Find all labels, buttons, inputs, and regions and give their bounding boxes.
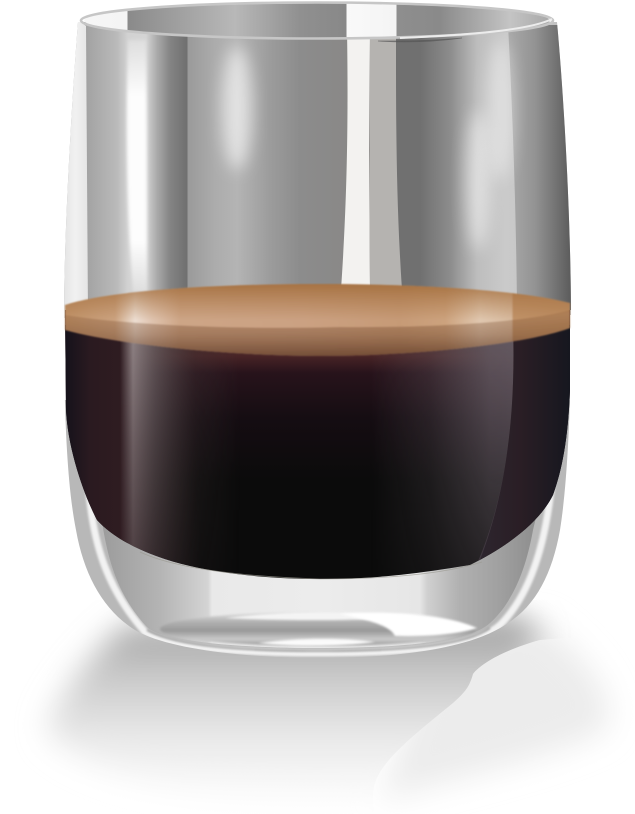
bottom ellipse of the glass — [160, 612, 477, 646]
shadow under rim — [378, 38, 462, 42]
grey vertical reflection — [370, 30, 402, 290]
soft light shadow lobe on the right — [380, 622, 609, 800]
left wall thickness — [64, 22, 88, 318]
rim right highlight — [400, 19, 552, 38]
crema top surface shade — [65, 284, 570, 328]
white right reflection on base — [340, 613, 477, 636]
white vertical reflection — [341, 30, 370, 290]
main cast shadow — [46, 615, 540, 806]
upper glass wall — [60, 15, 580, 318]
centre soft highlight — [222, 46, 252, 170]
coffee — [60, 310, 580, 585]
base inner block — [102, 520, 536, 648]
right soft highlight — [466, 110, 490, 250]
coffee left highlight — [121, 342, 210, 565]
coffee body — [60, 310, 575, 585]
crema base colour — [65, 284, 570, 356]
table shadow — [46, 615, 609, 806]
coffee right highlight — [392, 340, 514, 572]
crema — [65, 284, 570, 356]
crema lower band shade — [65, 310, 570, 356]
lower edge line — [147, 628, 490, 651]
fine base edge line under coffee — [140, 552, 482, 579]
glass rim back wall — [84, 4, 550, 38]
outer base band — [64, 400, 570, 633]
top reflection on base — [228, 612, 366, 621]
glass base — [60, 400, 580, 665]
right wall panel — [508, 25, 571, 310]
rim outline — [81, 2, 553, 38]
coffee left shading — [65, 325, 179, 564]
coffee right panel — [478, 325, 570, 561]
band highlight — [88, 480, 552, 653]
white lower reflection on base — [258, 639, 375, 646]
glass — [60, 2, 580, 665]
left bright highlight — [127, 40, 147, 292]
